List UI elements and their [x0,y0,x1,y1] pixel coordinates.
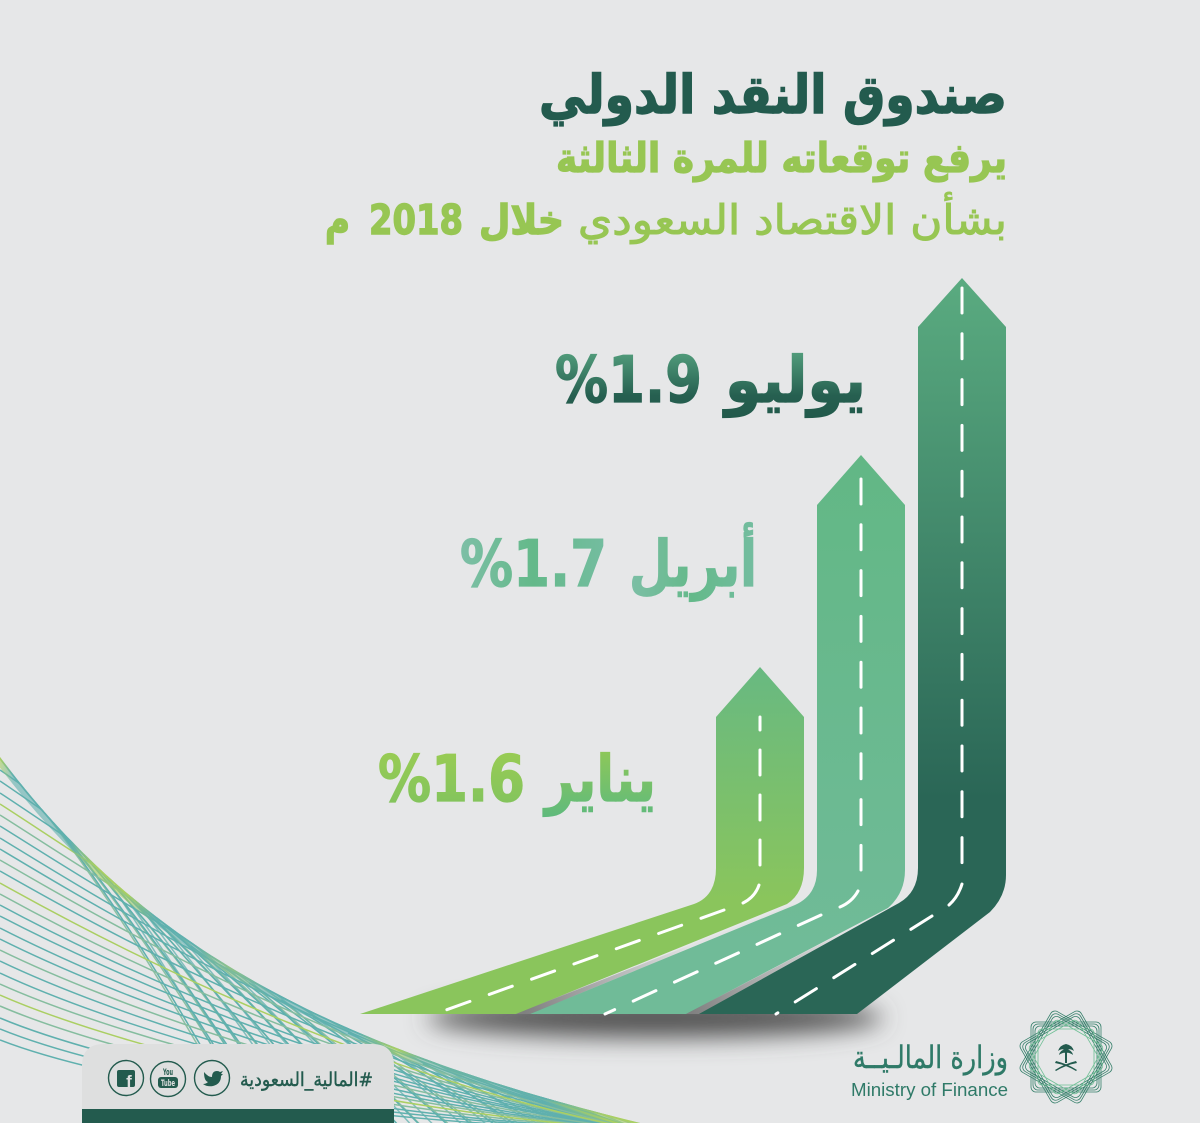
label: April 1.7% [460,522,757,602]
road dashes [446,717,760,1010]
label: July 1.9%: %1.9 [555,344,702,418]
icon: palm and swords [1055,1044,1077,1071]
icon: facebook: f [126,1072,132,1091]
label: April 1.7%: أبريل [629,522,757,602]
road dashes [776,288,962,1014]
road shadow [427,998,883,1038]
arrow road: April (mid green) [530,455,905,1014]
road dashes [605,479,861,1014]
subtitle line 2: خلال [479,196,564,244]
label: January 1.6%: يناير [543,743,656,817]
label: January 1.6%: %1.6 [378,743,525,817]
title: صندوق النقد الدولي [539,65,1007,126]
gap shadows between roads [516,903,899,1014]
arrow road: July (dark green) [699,278,1006,1014]
logo: ministry wordmark: وزارة المالـيــة [853,1040,1008,1076]
label: January 1.6% [378,743,656,817]
icon: youtube: You [162,1068,173,1078]
icon: youtube [150,1062,186,1096]
icon: youtube: Tube [161,1079,175,1089]
logo: rosette emblem [1018,1009,1114,1105]
panel: social media footer [82,1044,394,1123]
logo: ministry wordmark: Ministry of Finance [851,1080,1008,1100]
subtitle line 2: 2018 [369,196,463,244]
label: July 1.9%: يوليو [722,344,866,418]
arrow road: January (light green) [360,667,804,1014]
hashtag: #المالية_السعودية [240,1069,373,1091]
logo: ministry wordmark [851,1040,1008,1100]
subtitle line 2 [325,192,1007,245]
subtitle line 2: م [325,196,350,245]
label: April 1.7%: %1.7 [460,528,607,602]
subtitle line 1: يرفع توقعاته للمرة الثالثة [556,134,1007,182]
decorative woven line pattern [0,757,675,1123]
label: July 1.9% [555,344,866,418]
icon: facebook [108,1060,144,1096]
subtitle line 2: بشأن الاقتصاد السعودي [578,192,1007,244]
icon: twitter [194,1060,230,1096]
